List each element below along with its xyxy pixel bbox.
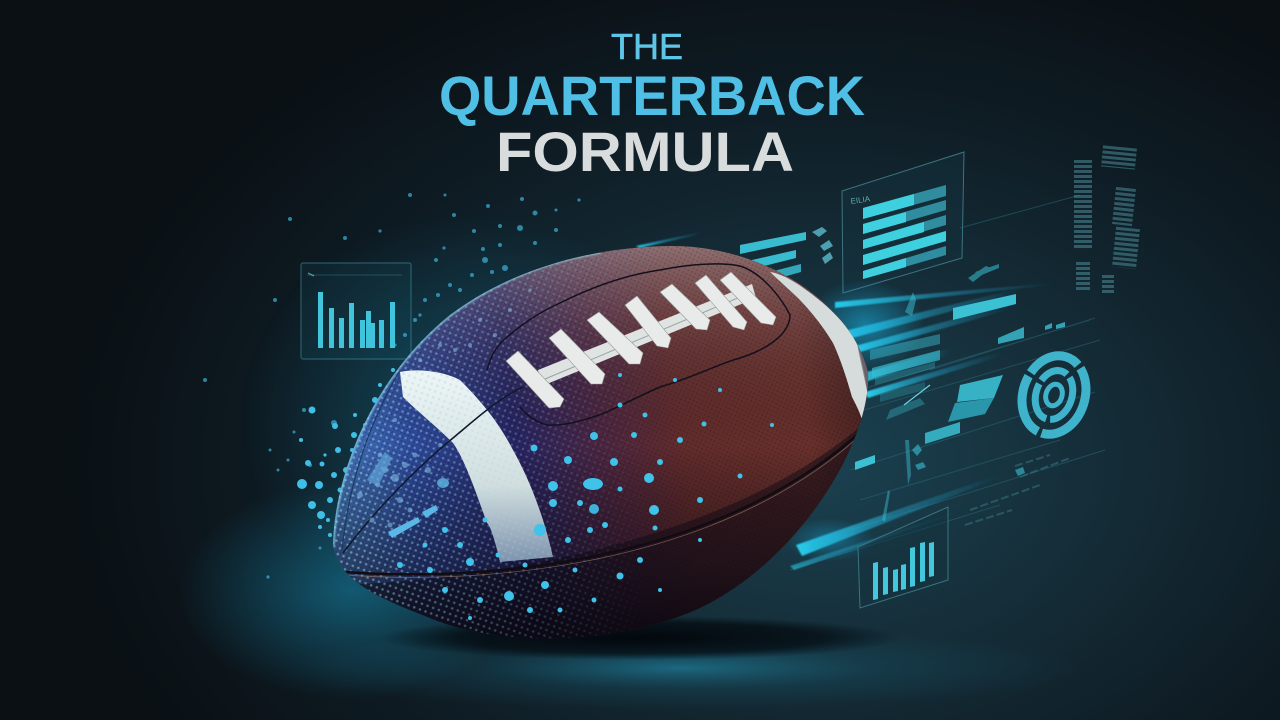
data panel: bars behind ball <box>740 227 833 283</box>
left glow <box>180 480 520 700</box>
title line: THE: THE <box>611 26 683 67</box>
title <box>439 26 865 183</box>
lower seam <box>345 425 868 574</box>
data columns: right-hand text noise <box>1083 147 1128 295</box>
laces <box>506 272 776 408</box>
light speckle on the left <box>333 250 639 638</box>
ball halo <box>240 210 700 630</box>
data panel: left bar chart <box>301 263 411 359</box>
data panel: upper-right horizontal bars <box>842 152 964 293</box>
lace panel outline <box>487 264 790 425</box>
data bars and fragments: mid right <box>855 264 1065 522</box>
side seam <box>342 370 400 550</box>
floor glow <box>280 626 1080 710</box>
long diagonal seam <box>343 387 523 553</box>
ball shadow <box>380 616 900 660</box>
dash of light on left blue panel <box>388 517 420 538</box>
speed lines <box>636 195 1105 570</box>
ball bottom dark shading <box>359 428 858 635</box>
right white stripe <box>770 272 868 424</box>
left glossy rim <box>333 252 600 545</box>
ball body <box>333 246 868 638</box>
title line: FORMULA: FORMULA <box>496 120 794 183</box>
lace stitches <box>506 272 776 408</box>
right rim <box>830 310 868 391</box>
icon: concentric target <box>1012 347 1096 443</box>
ball shading <box>333 246 841 638</box>
data panel: lower-right bar chart <box>858 507 948 608</box>
particles: over ball <box>357 288 774 620</box>
particles: spray outside ball <box>203 193 581 579</box>
data panel: upper-right horizontal bars: EILIA <box>850 194 871 206</box>
football <box>320 240 880 650</box>
beam glow <box>805 279 925 371</box>
data labels: faint lower-right marks <box>965 455 1070 525</box>
left white stripe <box>400 370 553 562</box>
title line: QUARTERBACK: QUARTERBACK <box>439 64 865 127</box>
lace spine <box>538 284 756 386</box>
